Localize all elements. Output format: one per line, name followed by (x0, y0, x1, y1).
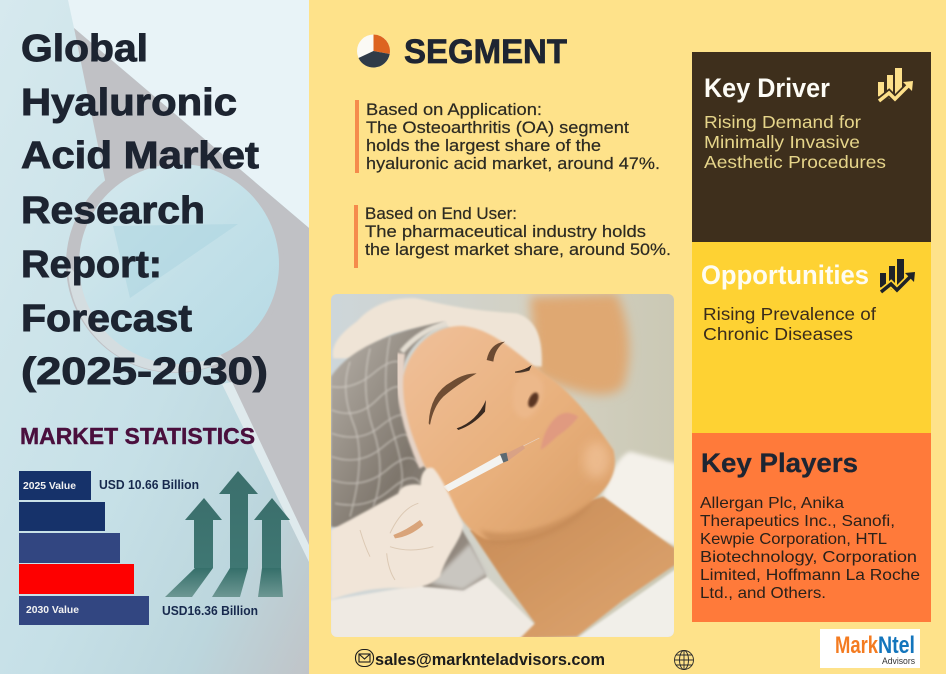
text block: application segment: The Osteoarthritis (OA) segment (366, 119, 629, 137)
title: (2025-2030) (21, 351, 268, 393)
gloved hand (430, 543, 487, 590)
heading: key players: Key Players (701, 448, 858, 478)
text block: end user segment (354, 205, 671, 268)
face (403, 326, 615, 540)
logo: MarkNtel Advisors: Ntel (878, 632, 915, 659)
text block: application segment: Based on Application: (366, 101, 542, 119)
icon: segment pie (357, 34, 390, 68)
title: Global (21, 28, 148, 70)
bar chart: market value steps: 2025 Value (23, 480, 76, 492)
heading: market statistics: MARKET STATISTICS (20, 423, 255, 449)
text: opportunity description (703, 304, 876, 344)
text block: end user segment: Based on End User: (365, 205, 517, 223)
syringe (443, 455, 505, 492)
title: Acid Market (21, 135, 259, 177)
bar chart: market value steps (19, 471, 149, 625)
icon: rising chart, dark (880, 259, 915, 292)
text: driver description: Aesthetic Procedures (704, 152, 886, 172)
text: list of players: Limited, Hoffmann La Roche (700, 567, 920, 584)
panel: left background with magnifier (0, 0, 309, 674)
icon: three growth arrows (165, 471, 290, 597)
title (21, 28, 268, 393)
neck (470, 497, 675, 638)
text: list of players (700, 495, 920, 602)
text: list of players: Ltd., and Others. (700, 585, 826, 602)
logo: MarkNtel Advisors: Mark (835, 632, 878, 659)
photo: hyaluronic acid injection (330, 290, 680, 640)
panel: key players (692, 433, 931, 622)
logo: MarkNtel Advisors: Advisors (882, 656, 915, 666)
text: email address: sales@marknteladvisors.com (375, 650, 605, 669)
text: list of players: Therapeutics Inc., Sanofi, (700, 513, 895, 530)
title: Research (21, 190, 205, 232)
heading: key driver: Key Driver (704, 73, 830, 103)
icon: globe (674, 650, 694, 670)
text block: end user segment: the largest market share, around 50%. (365, 241, 671, 259)
text block: end user segment: The pharmaceutical industry holds (365, 223, 646, 241)
text block: application segment: holds the largest share of the (366, 137, 601, 155)
panel: opportunities (692, 242, 931, 433)
text: opportunity description: Chronic Diseases (703, 324, 853, 344)
text: list of players: Kewpie Corporation, HTL (700, 531, 887, 548)
title: Hyaluronic (21, 82, 237, 124)
heading: opportunities: Opportunities (701, 260, 869, 290)
text: driver description: Rising Demand for (704, 112, 861, 132)
title: Forecast (21, 298, 192, 340)
panel: key driver (692, 52, 931, 242)
icon: email envelope (356, 650, 374, 666)
heading: segment: SEGMENT (404, 33, 567, 71)
text: list of players: Allergan Plc, Anika (700, 495, 844, 512)
hair net cap (331, 322, 487, 590)
icon: rising chart, light (878, 68, 913, 101)
label: 2025 value: USD 10.66 Billion (99, 477, 199, 492)
logo: MarkNtel Advisors (820, 629, 920, 668)
text block: application segment: hyaluronic acid market, around 47%. (366, 155, 660, 173)
text block: application segment (355, 100, 660, 173)
text: list of players: Biotechnology, Corporation (700, 549, 917, 566)
label: 2030 value: USD16.36 Billion (162, 603, 258, 618)
text: driver description: Minimally Invasive (704, 132, 860, 152)
bar chart: market value steps: 2030 Value (26, 604, 79, 616)
text: opportunity description: Rising Prevalence of (703, 304, 876, 324)
text: driver description (704, 112, 886, 172)
title: Report: (21, 244, 162, 286)
